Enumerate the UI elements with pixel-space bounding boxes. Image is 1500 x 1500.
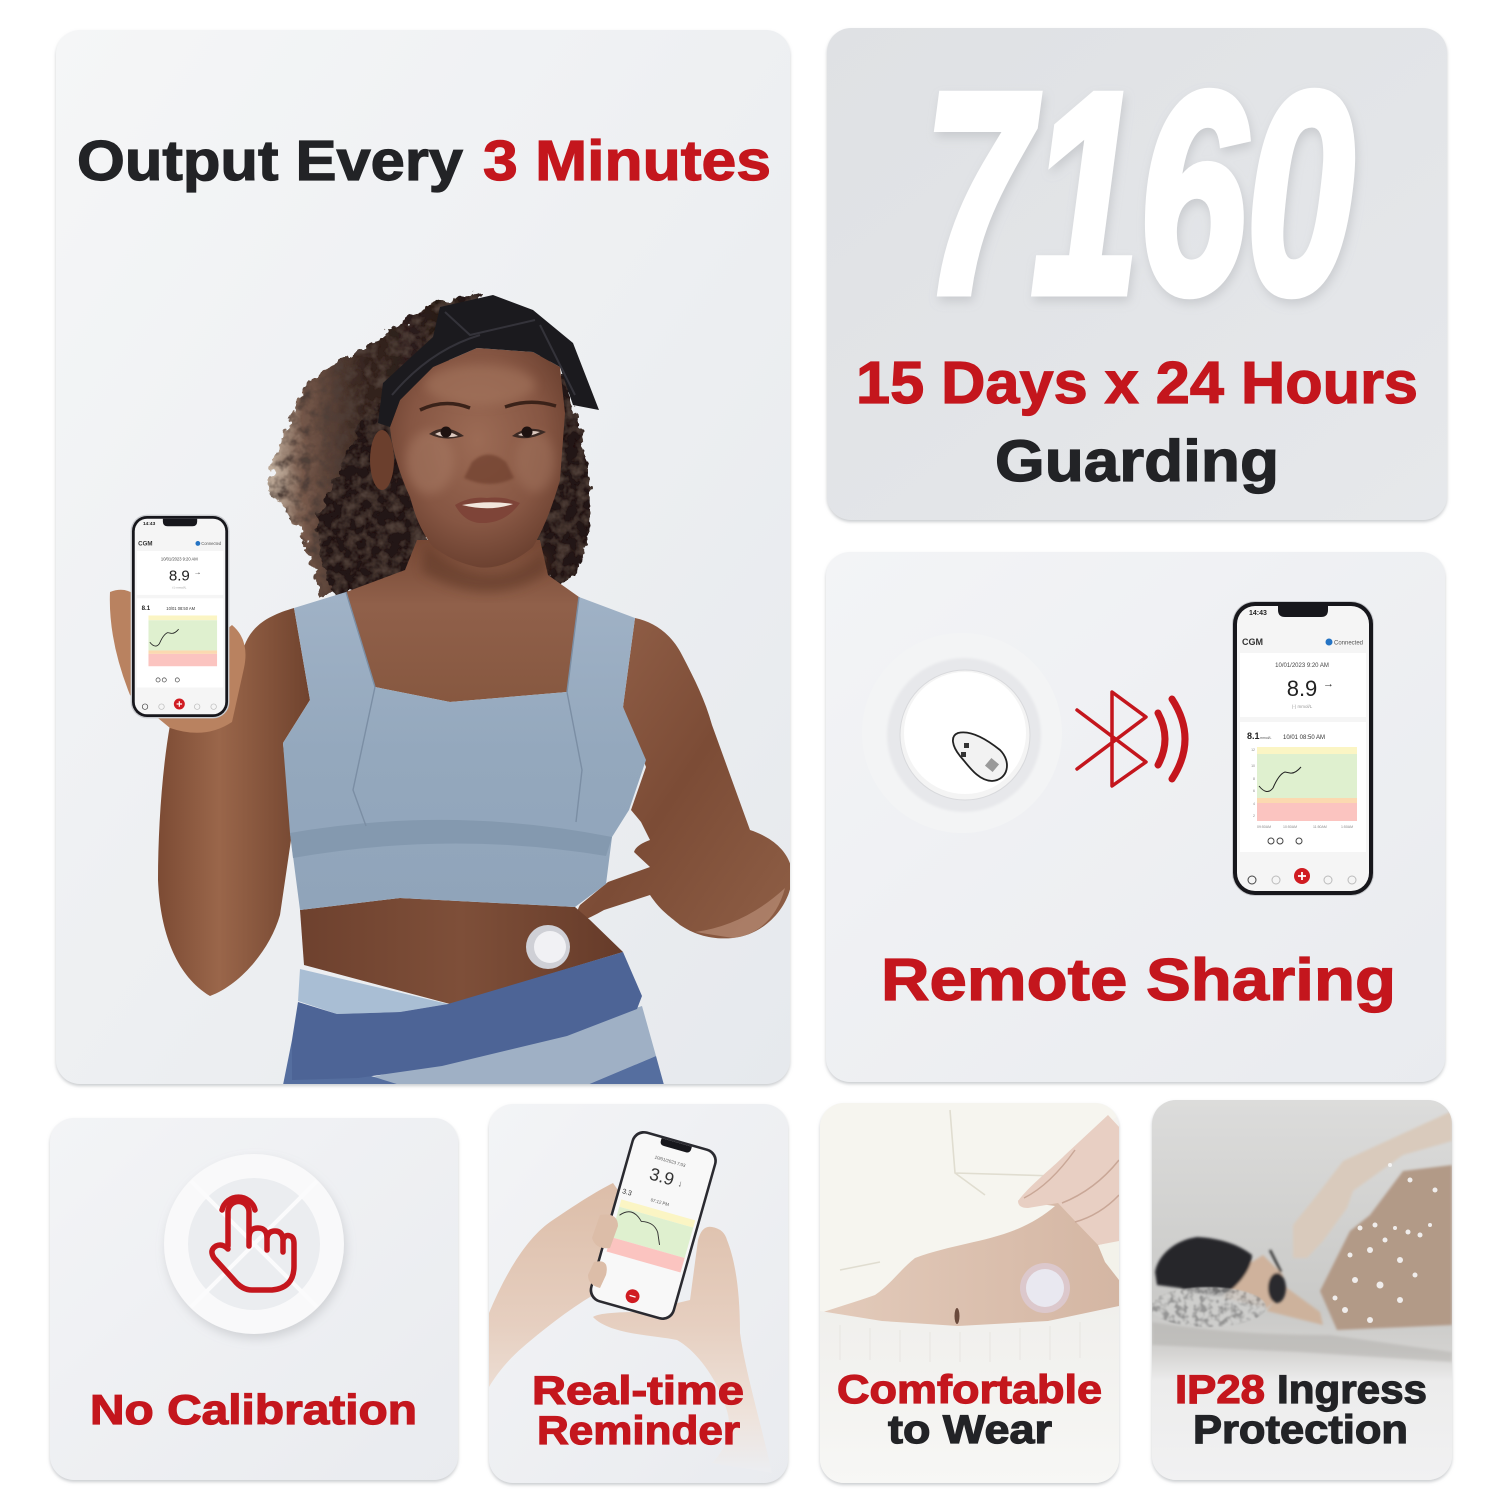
hand lifting shirt	[1018, 1115, 1120, 1245]
sensor illustration	[862, 633, 1062, 833]
small phone with CGM app: →	[194, 567, 201, 576]
label: IP28 ingress protection	[1175, 1368, 1427, 1452]
phone with CGM app: 6	[1253, 789, 1255, 793]
small phone with CGM app: 10/01 08:50 AM	[166, 606, 196, 611]
panel: real-time reminder	[489, 1104, 788, 1483]
phone with CGM app: 10/01/2023 9:20 AM	[1275, 663, 1329, 669]
heading: output every 3 minutes	[77, 129, 771, 193]
rotated phone: ↓	[677, 1178, 684, 1189]
hand behind phone	[110, 590, 246, 733]
phone with CGM app: 8.9	[1287, 676, 1317, 701]
label: IP28 ingress protection: IP28	[1175, 1368, 1265, 1412]
label: comfortable to wear: to Wear	[888, 1408, 1052, 1452]
phone with CGM app: 10:50AM	[1283, 825, 1297, 829]
phone with CGM app: CGM	[1242, 637, 1263, 647]
small phone with CGM app: 10/01/2023 9:20 AM	[161, 557, 198, 562]
phone with CGM app: 14:43	[1249, 610, 1267, 617]
photo: sensor on abdomen	[820, 1103, 1120, 1483]
heading: remote sharing: Remote Sharing	[881, 947, 1396, 1013]
phone with CGM app: →	[1323, 678, 1334, 690]
label: IP28 ingress protection: Protection	[1193, 1408, 1408, 1452]
label: comfortable to wear	[837, 1368, 1102, 1452]
heading: output every 3 minutes: 3 Minutes	[483, 129, 771, 193]
phone with CGM app: 10/01 08:50 AM	[1283, 735, 1325, 741]
phone with CGM app: 12	[1251, 748, 1255, 752]
swimmer head	[1155, 1237, 1286, 1308]
small phone with CGM app	[131, 515, 229, 718]
phone with CGM app: 11:50AM	[1313, 825, 1327, 829]
right arm and pointing hand	[577, 618, 792, 938]
icon: bluetooth signal	[1077, 692, 1185, 786]
splash	[1332, 1163, 1438, 1323]
leggings	[283, 952, 664, 1085]
forearm	[1267, 1285, 1323, 1325]
label: real-time reminder	[532, 1369, 744, 1453]
small phone with CGM app: (-) mmol/L	[172, 586, 187, 590]
photo: hands holding phone	[489, 1128, 772, 1473]
hair	[270, 294, 591, 597]
right hand and forearm	[593, 1226, 766, 1450]
rotated phone	[587, 1128, 720, 1323]
phone with CGM app	[1232, 601, 1374, 896]
panel: output every 3 minutes	[56, 30, 792, 1085]
fingers around phone	[588, 1214, 618, 1288]
waistband and pants	[820, 1306, 1119, 1483]
panel: no calibration	[50, 1118, 458, 1480]
label: IP28 ingress protection: Ingress	[1277, 1368, 1427, 1412]
sensor	[1020, 1263, 1070, 1313]
headband with bow	[378, 295, 599, 427]
phone with CGM app: 2	[1253, 814, 1255, 818]
small phone with CGM app: 8.1	[142, 605, 151, 612]
rotated phone: 3.3	[621, 1188, 633, 1198]
panel: comfortable to wear	[820, 1103, 1120, 1483]
phone with CGM app: 10	[1251, 764, 1255, 768]
photo: swimmer	[1152, 1100, 1452, 1374]
left arm with hand	[158, 608, 310, 996]
phone with CGM app: 4	[1253, 802, 1255, 806]
phone with CGM app: mmol/L	[1260, 736, 1272, 740]
panel: remote sharing	[826, 552, 1445, 1082]
panel: IP28 ingress protection	[1150, 1100, 1452, 1480]
sensor on abdomen	[526, 925, 570, 969]
swimmer arm and hand	[1293, 1111, 1452, 1258]
label: real-time reminder: Real-time	[532, 1369, 744, 1413]
small phone with CGM app: CGM	[138, 540, 153, 547]
panel: 7160 readings	[827, 28, 1447, 520]
small phone with CGM app: 8.9	[169, 567, 190, 584]
label: no calibration: No Calibration	[90, 1386, 417, 1433]
label: comfortable to wear: Comfortable	[837, 1368, 1102, 1412]
phone with CGM app: Connected	[1334, 640, 1363, 646]
label: real-time reminder: Reminder	[537, 1409, 740, 1453]
blue sports top	[283, 592, 646, 910]
rotated phone: 3.9	[647, 1164, 676, 1189]
phone with CGM app: 1:50AM	[1341, 825, 1353, 829]
phone with CGM app: 09:50AM	[1257, 825, 1271, 829]
phone with CGM app: 8	[1253, 777, 1255, 781]
face	[370, 348, 565, 568]
swimmer torso	[1320, 1165, 1452, 1330]
neck and chest	[346, 540, 579, 702]
icon: crossed-out touch hand	[164, 1154, 344, 1334]
left hand	[489, 1183, 625, 1387]
subheading: guarding: Guarding	[995, 429, 1279, 494]
small phone with CGM app: 14:43	[143, 521, 156, 527]
shirt	[820, 1200, 1055, 1312]
phone with CGM app: (-) mmol/L	[1292, 704, 1313, 709]
small phone with CGM app: Connected	[201, 541, 222, 546]
heading: output every 3 minutes: Output Every	[77, 129, 463, 193]
subheading: 15 days x 24 hours: 15 Days x 24 Hours	[856, 350, 1418, 416]
rotated phone: 07:12 PM	[650, 1197, 670, 1207]
rotated phone: 10/01/2023 7:03	[654, 1155, 687, 1168]
midriff	[300, 898, 623, 1004]
photo: woman wearing sensor and holding phone	[110, 294, 792, 1085]
phone with CGM app: 8.1	[1247, 731, 1260, 741]
